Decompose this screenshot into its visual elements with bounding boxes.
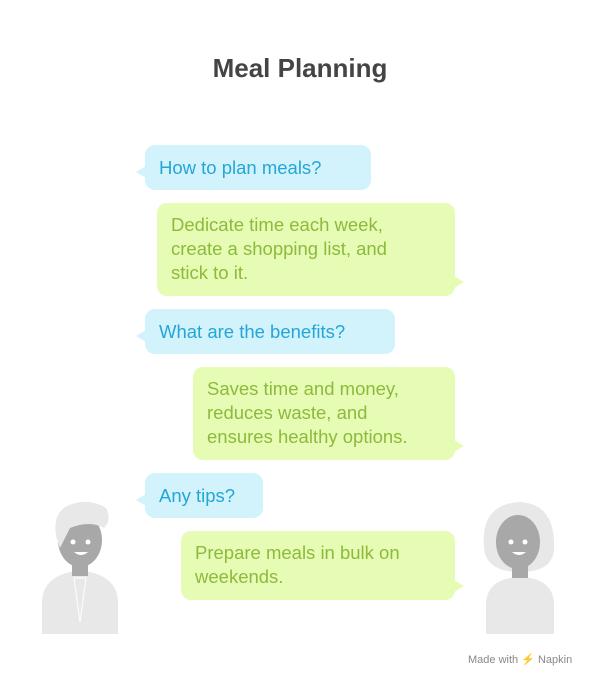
title: Meal Planning bbox=[213, 53, 387, 83]
bubble: question 3 bbox=[145, 473, 263, 518]
footer: made with Napkin: Made with ⚡ Napkin bbox=[468, 654, 572, 666]
bubble: answer 2: Saves time and money, bbox=[207, 378, 399, 399]
icon: woman avatar bbox=[484, 502, 554, 634]
bubble: question 3: Any tips? bbox=[159, 485, 235, 506]
bubble: question 1: How to plan meals? bbox=[159, 157, 321, 178]
bubble: answer 2 bbox=[193, 367, 455, 460]
bubble: answer 1: stick to it. bbox=[171, 262, 248, 283]
bubble: question 2: What are the benefits? bbox=[159, 321, 345, 342]
bubble: answer 3 bbox=[181, 531, 455, 600]
icon: man avatar bbox=[42, 502, 118, 634]
bubble: answer 1 bbox=[157, 203, 455, 296]
bubble: answer 3: weekends. bbox=[195, 566, 283, 587]
bubble: answer 3: Prepare meals in bulk on bbox=[195, 542, 400, 563]
bubble: answer 1: Dedicate time each week, bbox=[171, 214, 383, 235]
bubble: question 2 bbox=[145, 309, 395, 354]
bubble: question 1 bbox=[145, 145, 371, 190]
bubble: answer 2: ensures healthy options. bbox=[207, 426, 408, 447]
bubble: answer 2: reduces waste, and bbox=[207, 402, 367, 423]
bubble: answer 1: create a shopping list, and bbox=[171, 238, 387, 259]
